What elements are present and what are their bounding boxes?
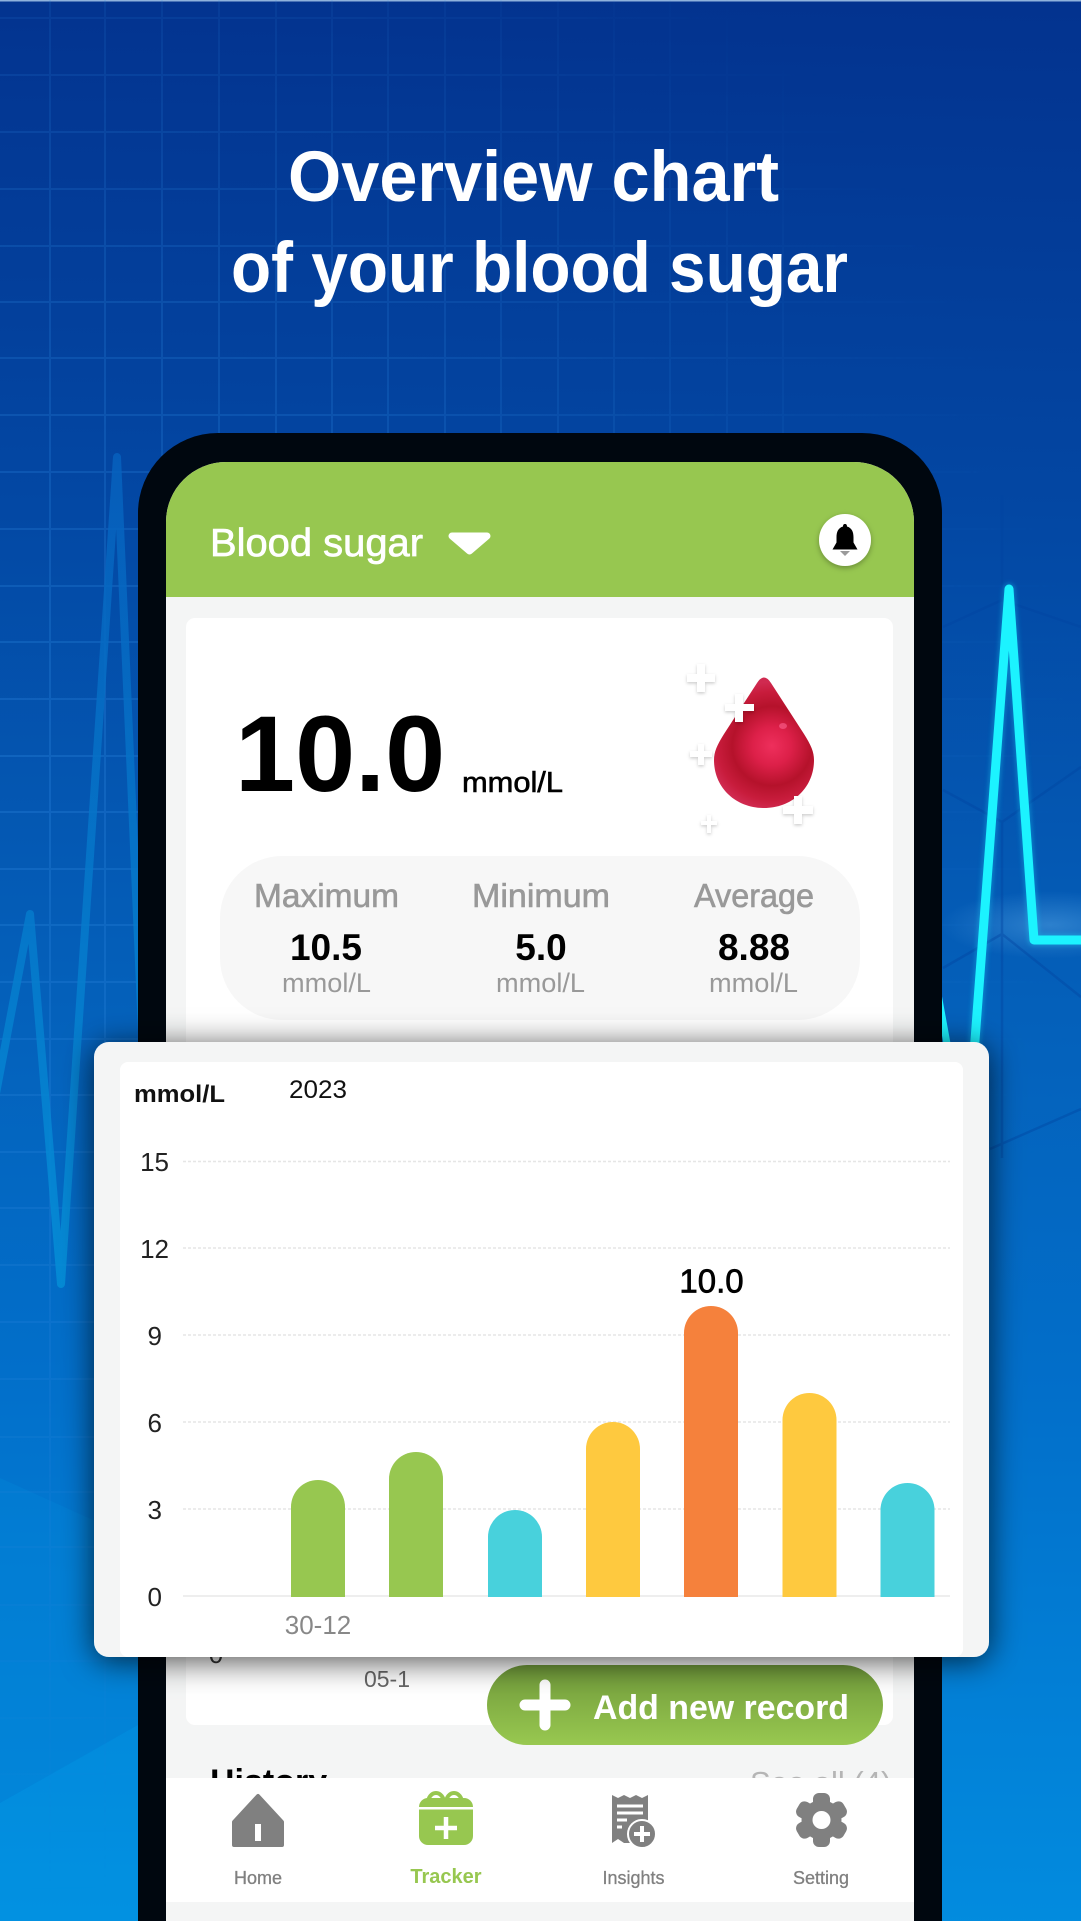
y axis labels: 12 <box>140 1234 169 1264</box>
bottom navigation <box>166 1778 914 1902</box>
chart axis unit: mmol/L <box>134 1081 225 1108</box>
stat: minimum: Minimum <box>472 877 610 914</box>
icon: home <box>234 1796 282 1845</box>
current reading value: 10.0 <box>235 693 445 814</box>
chart year: 2023 <box>289 1076 347 1104</box>
icon: blood drop <box>687 664 814 833</box>
y axis labels: 6 <box>148 1408 162 1438</box>
icon: settings gear <box>794 1793 849 1847</box>
label: tracker: Tracker <box>410 1866 482 1888</box>
title: of your blood sugar <box>231 229 848 308</box>
add new record button <box>487 1665 883 1745</box>
stat: minimum <box>474 882 608 992</box>
ECG line right <box>930 589 1081 1080</box>
stat: maximum <box>256 882 398 992</box>
label: setting: Setting <box>793 1868 849 1888</box>
title <box>231 138 848 308</box>
y axis labels: 15 <box>140 1147 169 1177</box>
stat: minimum: mmol/L <box>496 968 585 998</box>
hidden chart date label: 05-1 <box>364 1666 410 1692</box>
label: home: Home <box>234 1868 282 1888</box>
stat: average: Average <box>694 877 814 914</box>
chart gridlines <box>183 1162 950 1596</box>
stat: average <box>694 884 813 992</box>
background grid <box>0 0 679 1363</box>
stats pill <box>256 882 813 992</box>
icon: notification bell <box>819 514 871 566</box>
hidden chart axis remnant: 0 <box>209 1639 223 1669</box>
history heading: History <box>210 1763 327 1801</box>
title: Overview chart <box>288 138 779 217</box>
stat: maximum: mmol/L <box>282 968 371 998</box>
phone frame <box>138 433 942 1921</box>
see all link: See all (4) <box>750 1765 891 1800</box>
overview chart card <box>94 1042 989 1657</box>
background hexagon lines <box>943 495 1081 1158</box>
icon: plus <box>525 1685 565 1725</box>
phone screen <box>166 462 914 1921</box>
y axis labels: 9 <box>148 1321 162 1351</box>
main reading card <box>186 618 893 1725</box>
stat: minimum: 5.0 <box>515 927 567 968</box>
ECG line left <box>0 457 145 1284</box>
label: insights: Insights <box>602 1868 665 1888</box>
y axis labels <box>140 1147 169 1612</box>
button label: Add new record <box>593 1689 849 1727</box>
icon: tracker <box>419 1793 473 1845</box>
icon: dropdown arrow <box>452 536 487 551</box>
icon: insights <box>612 1795 656 1848</box>
y axis labels: 3 <box>148 1495 162 1525</box>
stat: maximum: Maximum <box>254 877 399 914</box>
highlighted bar value: 10.0 <box>679 1262 744 1300</box>
reading unit: mmol/L <box>462 767 563 799</box>
header title: Blood sugar <box>210 522 423 565</box>
app header <box>166 462 914 597</box>
stat: average: mmol/L <box>709 968 798 998</box>
y axis labels: 0 <box>148 1582 162 1612</box>
x axis date label: 30-12 <box>285 1610 351 1640</box>
bar chart <box>291 1306 934 1597</box>
stat: maximum: 10.5 <box>290 927 362 968</box>
stat: average: 8.88 <box>718 927 790 968</box>
